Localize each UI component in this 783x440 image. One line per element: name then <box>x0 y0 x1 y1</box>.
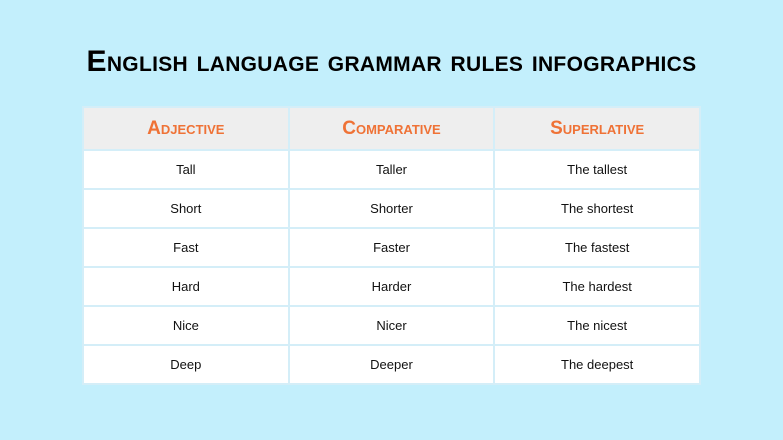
table: grammar comparison: Taller <box>376 162 407 177</box>
table: grammar comparison: Superlative <box>550 118 644 138</box>
table: grammar comparison: The deepest <box>561 357 633 372</box>
table: grammar comparison: The tallest <box>567 162 627 177</box>
table: grammar comparison: Comparative <box>342 118 441 138</box>
table: grammar comparison: The nicest <box>567 318 627 333</box>
table: grammar comparison <box>82 106 701 385</box>
table: grammar comparison: The shortest <box>561 201 633 216</box>
table: grammar comparison: The fastest <box>565 240 629 255</box>
title: English language grammar rules infographics <box>87 45 696 78</box>
table: grammar comparison: Harder <box>372 279 411 294</box>
table: grammar comparison: Adjective <box>147 118 224 138</box>
table: grammar comparison: Nice <box>173 318 199 333</box>
table: grammar comparison: Nicer <box>376 318 407 333</box>
table: grammar comparison: Tall <box>176 162 196 177</box>
table: grammar comparison: Deep <box>170 357 201 372</box>
table: grammar comparison: Deeper <box>370 357 413 372</box>
table: grammar comparison: The hardest <box>562 279 632 294</box>
table: grammar comparison: Shorter <box>370 201 413 216</box>
table: grammar comparison: Faster <box>373 240 410 255</box>
table: grammar comparison: Hard <box>172 279 200 294</box>
table: grammar comparison: Short <box>170 201 201 216</box>
table: grammar comparison: Fast <box>173 240 198 255</box>
